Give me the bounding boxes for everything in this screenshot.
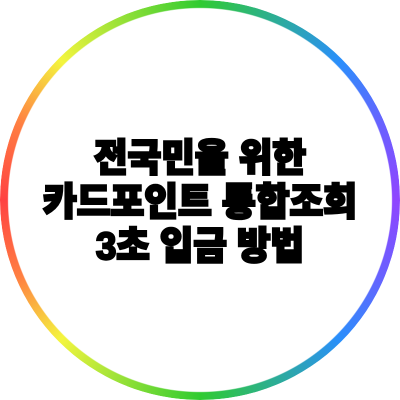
title: 카드포인트 통합조회 xyxy=(43,182,357,224)
title: 3초 입금 방법 xyxy=(96,226,304,268)
title: 전국민을 위한 xyxy=(94,138,306,180)
